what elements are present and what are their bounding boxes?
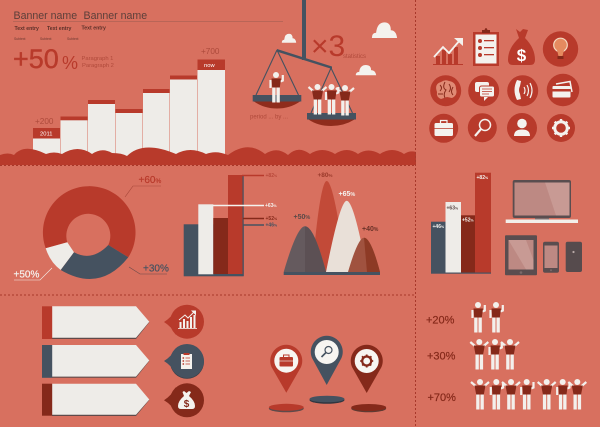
balance scale — [253, 0, 356, 126]
mountain area chart: +40% — [362, 226, 379, 233]
bubble: money bag: $ — [184, 399, 190, 410]
column chart with leader lines: +63% — [265, 203, 277, 209]
map pin: magnifier — [311, 336, 343, 385]
pin platform 2 — [310, 396, 344, 404]
bubble: clipboard — [164, 344, 204, 379]
column chart with leader lines — [184, 173, 278, 276]
smartphone back — [566, 242, 582, 272]
step bar chart: +700 — [201, 47, 220, 56]
label +60% — [125, 175, 161, 197]
icon: growth chart — [433, 38, 463, 65]
icon: magnifier — [468, 113, 497, 142]
icon: chat — [468, 75, 499, 106]
people row +70%: +70% — [428, 392, 456, 404]
multiplier stat: statistics — [343, 54, 366, 60]
header banner: Subtext — [14, 37, 26, 41]
header banner: Text entry — [47, 26, 72, 32]
donut chart — [14, 175, 169, 280]
column chart with leader lines: +46% — [266, 222, 278, 228]
label +30%: +30% — [143, 264, 169, 274]
icon: light bulb — [543, 31, 578, 67]
header banner: Banner name — [14, 10, 77, 22]
laptop — [506, 180, 578, 223]
icon: user — [507, 113, 537, 143]
headline stat +50%: Paragraph 1 — [82, 56, 113, 62]
people row +20% — [426, 302, 503, 332]
icon: briefcase — [429, 114, 458, 143]
bubble: growth chart — [164, 305, 204, 339]
right column chart: +82% — [476, 175, 489, 181]
header banner: Text entry — [14, 26, 39, 32]
ground silhouette — [0, 147, 416, 165]
column chart with leader lines: +82% — [266, 173, 278, 179]
people row +30%: +30% — [427, 350, 456, 362]
header banner: Banner name — [84, 10, 147, 22]
icon: brain — [430, 75, 461, 106]
tablet — [505, 235, 537, 275]
people on right pan — [308, 84, 354, 116]
right column chart: +52% — [462, 218, 474, 224]
step bar chart — [33, 47, 225, 158]
header banner: Text entry — [82, 26, 106, 32]
step bar chart: now — [204, 63, 215, 69]
icon: money bag — [508, 29, 535, 65]
column chart with leader lines: +52% — [266, 216, 278, 222]
step bar chart: +200 — [35, 117, 54, 126]
label +30% — [129, 264, 169, 274]
bubble: money bag — [164, 383, 204, 417]
right column chart: +63% — [446, 206, 459, 212]
clouds — [282, 22, 397, 75]
ribbon 1 — [42, 306, 149, 339]
people row +70% — [428, 379, 586, 410]
mountain area chart — [284, 172, 380, 275]
mountain area chart: +50% — [294, 214, 310, 221]
multiplier stat: ×3 — [311, 30, 345, 63]
pin platform 3 — [351, 404, 386, 412]
map pin: gear — [351, 345, 383, 393]
header banner: Subtext — [67, 37, 79, 41]
icon: gear — [547, 114, 575, 142]
ribbon 3 — [42, 384, 149, 416]
multiplier stat — [311, 30, 366, 63]
ribbon 2 — [42, 345, 149, 378]
icon: clipboard — [473, 28, 499, 66]
right column chart: +46% — [432, 224, 445, 230]
icon: phone — [507, 75, 538, 106]
headline stat +50%: +50 — [13, 44, 59, 74]
scale caption: period ... by ... — [250, 114, 288, 120]
step bar chart: 2011 — [40, 132, 52, 138]
label +50% — [14, 268, 52, 280]
icon: money bag: $ — [517, 46, 527, 65]
map pin: briefcase — [270, 345, 302, 393]
dashed dividers — [0, 0, 416, 427]
mountain area chart: +80% — [318, 172, 333, 179]
headline stat +50% — [13, 44, 114, 74]
person on left pan — [270, 72, 283, 102]
label +60%: +60% — [138, 175, 161, 186]
smartphone front — [543, 242, 559, 273]
label +50%: +50% — [14, 270, 39, 280]
mountain area chart: +65% — [338, 191, 355, 198]
right column chart — [431, 173, 491, 274]
people row +20%: +20% — [426, 314, 455, 326]
people row +30% — [427, 339, 519, 370]
header banner — [13, 10, 283, 41]
headline stat +50%: % — [62, 53, 78, 73]
pin platform 1 — [269, 404, 304, 412]
icon: cards — [547, 74, 579, 106]
header banner: Subtext — [40, 37, 52, 41]
headline stat +50%: Paragraph 2 — [82, 63, 114, 69]
